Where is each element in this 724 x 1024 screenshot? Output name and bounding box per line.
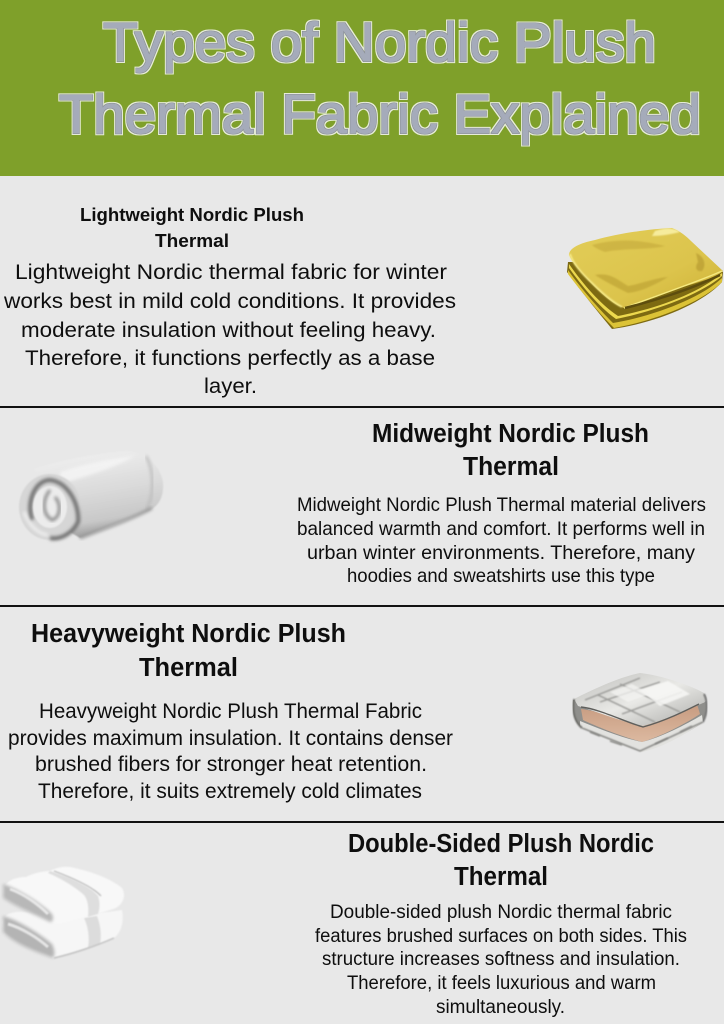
heading: midweight: [372, 420, 649, 481]
heading: midweight: Midweight Nordic Plush: [372, 420, 649, 448]
panel: heavyweight: [8, 620, 707, 803]
text: double-sided description: Therefore, it feels luxurious and warm: [347, 973, 656, 994]
text: double-sided description: Double-sided plush Nordic thermal fabric: [330, 902, 672, 923]
panel: double-sided: [2, 830, 687, 1018]
text: double-sided description: [315, 902, 687, 1018]
heading: heavyweight: Thermal: [139, 654, 238, 682]
text: heavyweight description: Therefore, it suits extremely cold climates: [38, 780, 422, 803]
text: lightweight description: moderate insulation without feeling heavy.: [21, 318, 436, 342]
icon: folded gold fabric: [567, 228, 723, 329]
text: heavyweight description: provides maximum insulation. It contains denser: [8, 727, 453, 750]
divider: [0, 821, 724, 823]
text: double-sided description: structure increases softness and insulation.: [322, 949, 680, 970]
text: lightweight description: Therefore, it functions perfectly as a base: [25, 346, 435, 370]
icon: rolled white towel: [19, 451, 163, 540]
heading: heavyweight: [31, 620, 346, 682]
text: double-sided description: simultaneously.: [436, 997, 565, 1018]
text: midweight description: [297, 494, 706, 587]
text: heavyweight description: brushed fibers for stronger heat retention.: [35, 753, 427, 776]
text: midweight description: urban winter environments. Therefore, many: [307, 542, 695, 564]
heading: double-sided: Double-Sided Plush Nordic: [348, 830, 654, 858]
icon: quilted silver blanket: [573, 673, 707, 752]
heading: lightweight: Thermal: [155, 231, 229, 251]
text: lightweight description: Lightweight Nordic thermal fabric for winter: [15, 260, 447, 284]
text: midweight description: hoodies and sweatshirts use this type: [347, 565, 655, 587]
title: Types of Nordic Plush: [103, 11, 656, 73]
title: Thermal Fabric Explained: [59, 83, 701, 145]
text: double-sided description: features brushed surfaces on both sides. This: [315, 926, 687, 947]
panel: lightweight: [3, 205, 723, 398]
heading: midweight: Thermal: [463, 453, 559, 481]
text: midweight description: Midweight Nordic Plush Thermal material delivers: [297, 494, 706, 516]
title: [59, 11, 701, 145]
text: midweight description: balanced warmth and comfort. It performs well in: [297, 518, 705, 540]
text: lightweight description: layer.: [204, 374, 257, 398]
title banner: [0, 0, 724, 176]
divider: [0, 605, 724, 607]
divider: [0, 406, 724, 408]
icon: stacked white towels: [2, 867, 124, 958]
text: lightweight description: works best in mild cold conditions. It provides: [3, 289, 456, 313]
panel: midweight: [19, 420, 706, 587]
heading: lightweight: Lightweight Nordic Plush: [80, 205, 304, 225]
text: lightweight description: [3, 260, 456, 398]
text: heavyweight description: Heavyweight Nordic Plush Thermal Fabric: [39, 700, 422, 723]
heading: heavyweight: Heavyweight Nordic Plush: [31, 620, 346, 648]
text: heavyweight description: [8, 700, 453, 803]
heading: lightweight: [80, 205, 304, 251]
heading: double-sided: [348, 830, 654, 891]
heading: double-sided: Thermal: [454, 863, 548, 891]
